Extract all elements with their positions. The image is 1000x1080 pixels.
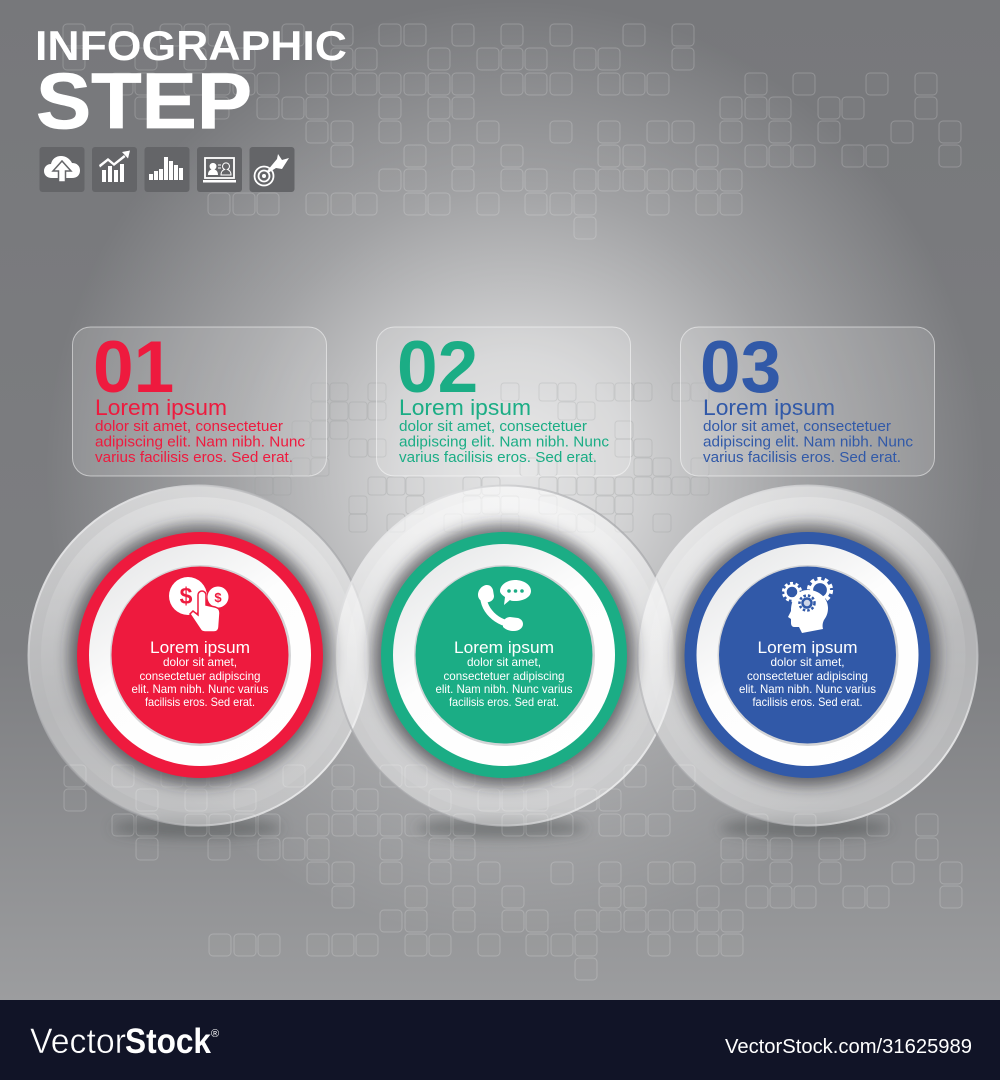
card body (95, 419, 305, 466)
card body: dolor sit amet, consectetuer (95, 419, 283, 435)
background tile pattern: lower (64, 765, 962, 980)
circle body (436, 655, 572, 709)
card body: varius facilisis eros. Sed erat. (95, 450, 293, 466)
circle body: consectetuer adipiscing (140, 669, 260, 683)
panel: card 01 (72, 327, 326, 476)
title: STEP (36, 56, 252, 145)
icon: hand and dollar coins: $ (180, 583, 193, 609)
icon: hand and dollar coins (169, 577, 228, 632)
step 3 circle (676, 524, 938, 786)
circle body: elit. Nam nibh. Nunc varius (739, 682, 876, 696)
footer logo: Vector (30, 1022, 126, 1061)
circle body: facilisis eros. Sed erat. (752, 695, 862, 709)
icon: target arrow (250, 147, 294, 192)
icon: cloud upload (40, 147, 84, 192)
circle body: elit. Nam nibh. Nunc varius (436, 682, 572, 696)
circle body: consectetuer adipiscing (444, 669, 564, 683)
card body: adipiscing elit. Nam nibh. Nunc (95, 434, 305, 450)
background tile pattern: middle (237, 383, 709, 532)
circle body: facilisis eros. Sed erat. (145, 695, 255, 709)
glass disc 1 (28, 486, 368, 826)
step 2 circle (373, 524, 635, 786)
card body (399, 419, 609, 466)
card body: varius facilisis eros. Sed erat. (399, 450, 597, 466)
circle body: dolor sit amet, (770, 655, 844, 669)
floor shadows (112, 818, 890, 838)
circle body: consectetuer adipiscing (747, 669, 868, 683)
circle heading: Lorem ipsum (758, 639, 858, 657)
step 1 circle (69, 524, 331, 786)
icon: bar chart (144, 147, 190, 192)
background tile pattern: upper (63, 24, 961, 239)
icon: phone and speech bubble (478, 580, 531, 631)
title (35, 22, 347, 145)
circle body: facilisis eros. Sed erat. (449, 695, 559, 709)
title: INFOGRAPHIC (35, 22, 347, 69)
card body: dolor sit amet, consectetuer (703, 419, 891, 435)
card body: adipiscing elit. Nam nibh. Nunc (399, 434, 609, 450)
number 02: 02 (397, 327, 478, 408)
card body (703, 419, 913, 466)
circle body: dolor sit amet, (163, 655, 237, 669)
card heading: Lorem ipsum (399, 395, 531, 420)
footer image id: VectorStock.com/31625989 (725, 1036, 972, 1058)
card body: adipiscing elit. Nam nibh. Nunc (703, 434, 913, 450)
circle heading: Lorem ipsum (150, 639, 250, 657)
circle body: elit. Nam nibh. Nunc varius (132, 682, 268, 696)
glass disc 2 (335, 486, 675, 826)
card heading: Lorem ipsum (95, 395, 227, 420)
circle body (132, 655, 268, 709)
circle body: dolor sit amet, (467, 655, 541, 669)
footer logo (30, 1022, 219, 1061)
footer logo: Stock (125, 1022, 211, 1061)
panel: card 03 (680, 327, 934, 476)
panel: card 02 (376, 327, 630, 476)
circle body (739, 655, 876, 709)
icon: laptop video call (197, 147, 242, 192)
footer bar (0, 1000, 1000, 1080)
card body: dolor sit amet, consectetuer (399, 419, 587, 435)
card body: varius facilisis eros. Sed erat. (703, 450, 901, 466)
icon row (40, 147, 294, 192)
number 01: 01 (93, 327, 174, 408)
card heading: Lorem ipsum (703, 395, 835, 420)
icon: hand and dollar coins: $ (214, 590, 222, 605)
footer logo: ® (211, 1028, 219, 1040)
number 03: 03 (700, 327, 781, 408)
icon: head with gears (783, 579, 831, 633)
icon: growth chart (92, 147, 137, 192)
circle heading: Lorem ipsum (454, 639, 554, 657)
glass disc 3 (638, 486, 978, 826)
